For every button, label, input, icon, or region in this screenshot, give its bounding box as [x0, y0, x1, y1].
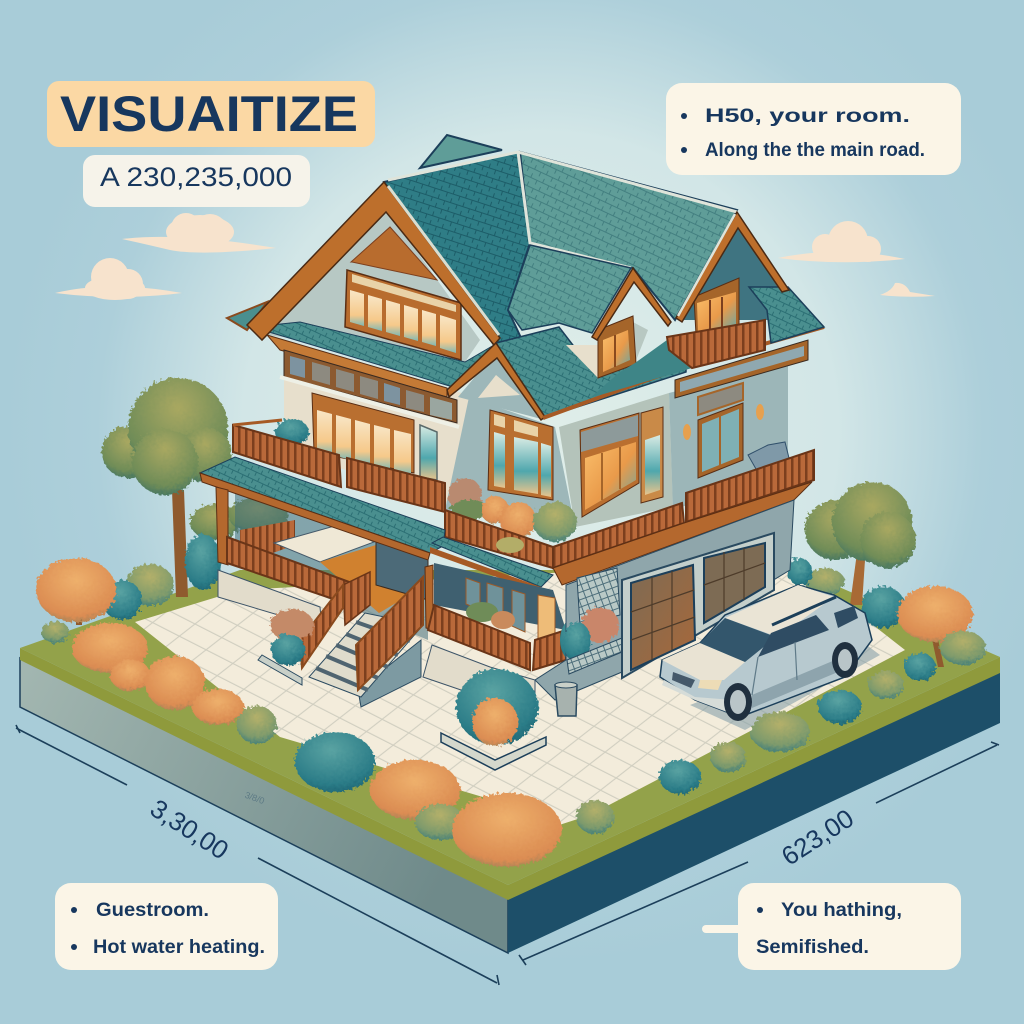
callout: bottom right [702, 883, 961, 970]
platform [20, 570, 1000, 953]
car door seam [752, 642, 797, 695]
car rear window [834, 606, 858, 628]
back shrubs left [102, 497, 288, 620]
roof: center dormer slope [508, 245, 631, 333]
walls second floor [284, 350, 470, 510]
small entry roof [432, 537, 553, 587]
garage wall [535, 500, 794, 700]
roof: main left face [384, 152, 530, 345]
garage door left [631, 565, 695, 670]
right side roof [749, 287, 824, 343]
car roof rail [772, 597, 836, 625]
left gable barge board [247, 182, 500, 345]
foreground bushes [41, 621, 986, 867]
wall lower right window top [698, 383, 743, 415]
cream slope under dormer [566, 345, 598, 378]
entry rail corner [533, 630, 566, 670]
callout: top right: H50, your room. [705, 106, 910, 127]
porch back railing [240, 520, 295, 565]
wall cream patch [478, 375, 520, 398]
porch door wall [376, 540, 428, 600]
left eave board [267, 335, 447, 397]
garage frame [622, 533, 774, 678]
porch wood floor [320, 545, 423, 613]
car hood [662, 643, 745, 680]
porch left rail [227, 537, 352, 603]
balcony shrubs [448, 478, 577, 542]
house [200, 135, 824, 707]
left lower roof [269, 322, 494, 387]
small upper balcony [667, 320, 765, 368]
car front wheel [724, 683, 752, 721]
gable wood siding [351, 227, 437, 280]
wall: center [559, 393, 673, 527]
title badge: VISUAITIZE [60, 86, 358, 142]
roof ridge highlights [388, 152, 737, 268]
callout: top right [666, 83, 961, 175]
window: mid left [488, 410, 553, 500]
car shadow [690, 640, 880, 730]
subtitle badge: A 230,235,000 [100, 162, 292, 192]
middle gable barge board [447, 343, 545, 420]
cloud: upper right [778, 221, 905, 262]
porch roof eave [200, 473, 430, 560]
callout: bottom right: Semifished. [756, 937, 869, 958]
stairs [309, 613, 423, 697]
platform grass lip [20, 648, 1000, 900]
clerestory band right [675, 340, 808, 398]
stair planter bush [258, 609, 314, 685]
car bumper [662, 680, 735, 715]
ground floor glazing [434, 563, 566, 650]
middle gable [496, 327, 686, 418]
tree: right [805, 482, 916, 605]
callout: top right: Along the the main road. [705, 140, 925, 161]
planter with bushes [441, 669, 546, 770]
platform left side [20, 658, 508, 953]
callout: bottom left: Hot water heating. [93, 937, 265, 958]
entry column [425, 565, 433, 630]
right gable dark wall [680, 212, 788, 320]
chair on balcony [748, 442, 790, 476]
car side windows [758, 615, 829, 657]
tree: left large [102, 378, 232, 597]
stair rail right [356, 577, 423, 690]
wrap balcony railing [445, 450, 814, 568]
car windshield [700, 618, 776, 662]
bush by entry [560, 616, 596, 664]
tree: small orange right [897, 586, 973, 667]
white trim line [280, 377, 459, 427]
entry eave [430, 547, 541, 593]
cloud: small right [880, 283, 935, 297]
middle gable wall [458, 352, 545, 420]
car headlight [698, 680, 722, 690]
window: center glow [580, 407, 663, 517]
mesh side panel [577, 568, 620, 625]
roof: back small gable [420, 135, 502, 168]
car rear wheel [832, 642, 858, 678]
subtitle badge [83, 155, 310, 207]
callout: bottom left [55, 883, 278, 970]
entry rail [428, 605, 530, 670]
porch interior [235, 490, 428, 640]
window: lower right [698, 403, 743, 478]
shrub on upper balcony [275, 419, 309, 445]
platform grass top [20, 570, 1000, 885]
planter fence [567, 638, 622, 674]
gable upper windows [345, 270, 461, 360]
dormer [592, 268, 671, 378]
callout: bottom left: Guestroom. [96, 900, 209, 921]
right gable barge board [676, 212, 789, 322]
main right eave [543, 327, 824, 418]
flowering bush front [581, 607, 619, 643]
stair rail left [300, 585, 343, 668]
car body [660, 585, 872, 717]
wall lamps [683, 404, 764, 440]
deck beam [553, 482, 812, 585]
wall: right [669, 363, 788, 510]
cloud: upper left [122, 213, 276, 253]
dimension line right [519, 742, 999, 965]
second floor large windows [312, 393, 437, 480]
porch base wall [218, 570, 322, 628]
teal bush front [563, 622, 591, 662]
right gable window [694, 278, 739, 335]
dimension label left: 3,30,00 [145, 793, 234, 865]
porch left column [216, 487, 228, 565]
left side roof stub [227, 302, 267, 330]
car lower sill [752, 660, 838, 708]
small label on side: 3/8/0 [244, 790, 266, 806]
tree: small orange left [36, 558, 116, 625]
dimension label right: 623,00 [776, 803, 859, 871]
car roof [725, 585, 834, 637]
flowering bush [582, 608, 618, 642]
car grille [672, 672, 695, 688]
roof: main right face [520, 152, 737, 320]
wall: left mid [445, 397, 575, 527]
trash bin [555, 682, 577, 716]
left gable wall [268, 208, 480, 362]
cloud: lower left [55, 258, 182, 300]
clerestory band left [284, 350, 457, 423]
car [660, 585, 880, 730]
callout: bottom right: You hathing, [781, 900, 902, 921]
garage door right [704, 543, 765, 623]
back shrubs right [788, 558, 905, 628]
foundation right of stairs [358, 640, 535, 707]
upper balcony left railing [233, 420, 445, 512]
right lower roof patch [590, 340, 692, 398]
platform right side [508, 671, 1000, 953]
driveway paving [135, 560, 905, 828]
dimension line left [16, 725, 499, 985]
porch cushion [274, 525, 374, 562]
stair post rail [343, 572, 370, 625]
porch roof [200, 457, 445, 553]
barge board highlight [388, 186, 499, 335]
right gable highlight [678, 214, 735, 316]
